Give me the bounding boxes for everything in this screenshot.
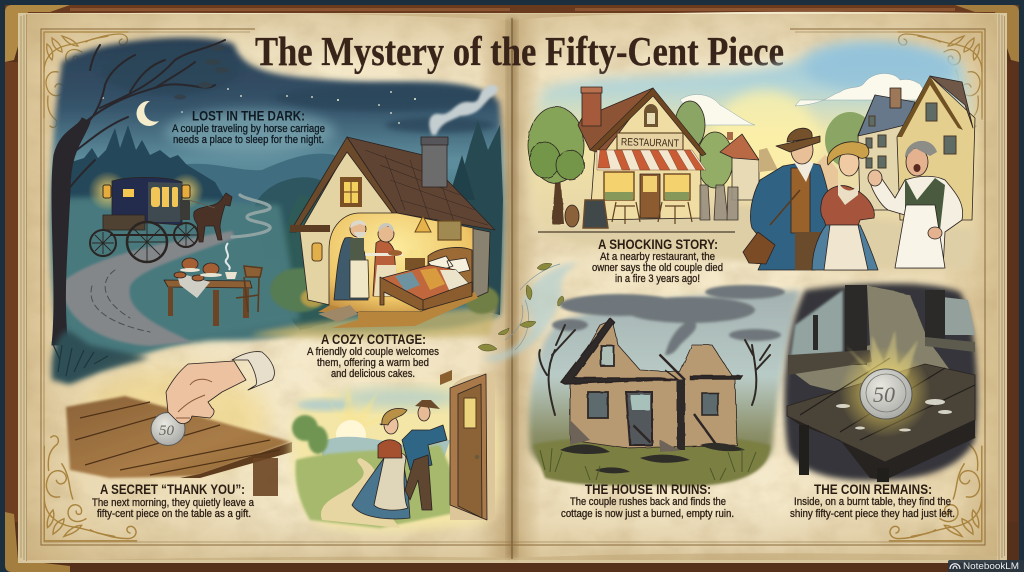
cobblestone ground (537, 205, 975, 269)
distant hills and forest (60, 120, 503, 330)
restaurant building (538, 87, 738, 232)
sandy foreground path (250, 305, 498, 339)
bare trees (539, 325, 770, 415)
panel: lost in the dark and cozy cottage night scene (50, 38, 504, 384)
burnt plaster wall (790, 285, 950, 400)
winding footpath (321, 458, 400, 528)
night sky and ground wash (50, 38, 504, 382)
sun glow (710, 90, 820, 200)
right-hand townhouses (858, 76, 975, 220)
horse carriage (88, 171, 232, 262)
dark scene heading: lost in the dark (172, 108, 325, 146)
text: a cozy cottage: them, offering a warm bed (317, 357, 429, 369)
text: a shocking story (592, 237, 723, 285)
text: the coin remains: Inside, on a burnt table, they find the (794, 496, 951, 508)
panel: couple leaving at sunrise (292, 370, 499, 530)
clouds (680, 74, 930, 125)
text: a cozy cottage: A COZY COTTAGE: (321, 332, 426, 347)
grass ground (533, 436, 770, 486)
text: a secret thank you (92, 482, 255, 520)
text: a cozy cottage: and delicious cakes. (331, 368, 415, 380)
text: a cozy cottage: A friendly old couple welcomes (307, 346, 439, 358)
text: a secret thank you: The next morning, they quietly leave a (92, 497, 255, 509)
text: a secret thank you: A SECRET “THANK YOU”: (100, 482, 245, 497)
tree left (528, 107, 584, 224)
text: a shocking story: in a fire 3 years ago! (615, 273, 700, 285)
coin light glow and rays (839, 330, 931, 438)
old couple and bed (334, 220, 472, 310)
dark room wash (784, 284, 977, 480)
text: a shocking story: A SHOCKING STORY: (598, 237, 718, 252)
title: The Mystery of the Fifty-Cent Piece (255, 28, 784, 74)
cottage with open cutaway (290, 137, 495, 328)
hills and meadow (292, 415, 470, 528)
grey sky and grass wash (529, 290, 800, 483)
young woman in bonnet (812, 142, 878, 270)
restaurant building: RESTAURANT (621, 136, 680, 150)
meadow (62, 197, 300, 375)
grass foreground left (52, 330, 150, 384)
text: the coin remains: shiny fifty-cent piece they had just left. (790, 508, 955, 520)
text: the coin remains (790, 482, 955, 520)
NotebookLM badge: NotebookLM (963, 561, 1019, 572)
panel: the coin remains (784, 284, 977, 520)
scorched window frames (788, 285, 975, 375)
chimney smoke (429, 85, 498, 135)
text: a secret thank you: fifty-cent piece on the table as a gift. (97, 508, 251, 520)
warm light behind table (80, 370, 270, 470)
smoke clouds (552, 285, 785, 355)
table with cakes (164, 243, 262, 326)
bushes by the cottage (270, 268, 499, 314)
back trees and houses (675, 101, 875, 205)
left page (27, 13, 512, 561)
text: house in ruins: THE HOUSE IN RUINS: (585, 482, 711, 497)
charred debris and grass tufts (540, 443, 756, 480)
dark cloud bands (100, 45, 495, 133)
glowing fifty-cent coin: 50 (873, 382, 895, 407)
text: a shocking story: At a nearby restaurant, the (600, 251, 715, 263)
text: house in ruins (561, 482, 734, 520)
panel: a secret thank you (66, 352, 292, 520)
woman in blue dress (352, 408, 410, 519)
winding road (62, 195, 270, 346)
shop owner in apron (868, 141, 963, 268)
panel: restaurant village scene (528, 41, 976, 285)
wooden table (66, 396, 292, 496)
hand placing coin (166, 352, 274, 424)
NotebookLM badge (948, 560, 1024, 572)
blue sky patch (805, 48, 955, 92)
dark scene heading: lost in the dark: needs a place to sleep for the night. (173, 134, 324, 146)
glowing fifty-cent coin (860, 369, 912, 419)
text: a shocking story: owner says the old couple died (592, 262, 723, 274)
text: house in ruins: cottage is now just a burned, empty ruin. (561, 508, 734, 520)
silver coin: 50 (159, 423, 174, 439)
swirling wind with leaves (478, 262, 580, 362)
sun with rays (325, 385, 398, 450)
silver coin (151, 412, 185, 446)
text: the coin remains: THE COIN REMAINS: (814, 482, 932, 497)
young man in blue coat (743, 128, 838, 270)
text: a cozy cottage (307, 332, 439, 380)
panel: house in ruins (529, 285, 800, 520)
day sky wash (529, 41, 976, 269)
grey outdoors through broken window (790, 290, 975, 360)
burnt table (787, 358, 975, 482)
burned cottage walls (561, 318, 742, 452)
man in blue jacket and hat (402, 400, 447, 510)
bare tree (52, 40, 229, 345)
stars (102, 88, 416, 124)
text: house in ruins: The couple rushes back and finds the (570, 496, 726, 508)
dark scene heading: lost in the dark: LOST IN THE DARK: (192, 108, 305, 124)
crescent moon (137, 101, 159, 126)
lighter sky patch behind caption (165, 110, 335, 154)
dark scene heading: lost in the dark: A couple traveling by horse carriage (172, 123, 325, 135)
right page (512, 12, 998, 558)
sunrise sky wash (292, 385, 499, 530)
wooden cottage door (440, 370, 495, 520)
